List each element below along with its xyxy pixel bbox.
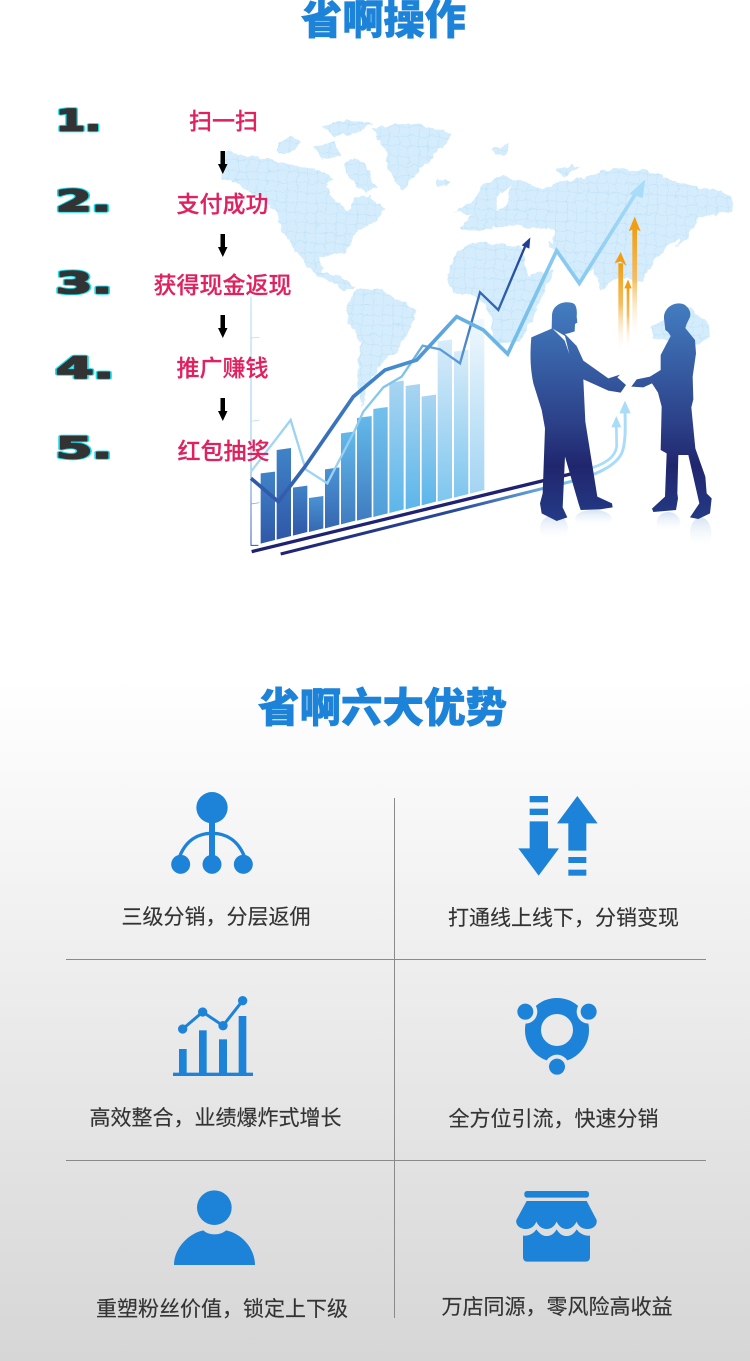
step 1 number: 1. (56, 104, 101, 138)
floor reflections (540, 510, 711, 549)
arrow 4 (218, 398, 228, 421)
icon: bar and line chart (173, 996, 253, 1076)
step 5 number (56, 431, 112, 465)
bar chart (261, 319, 484, 544)
heading: 省啊六大优势: 省啊六大优势 (258, 685, 507, 731)
step 3 number: 3. (56, 266, 112, 300)
step 4 number: 4. (56, 351, 114, 385)
businessman silhouette (530, 302, 626, 521)
step 5 number: 5. (56, 431, 112, 465)
chart axis (251, 297, 259, 545)
steps list (56, 104, 292, 465)
icon: up and down arrows (518, 796, 598, 876)
step 4 number (56, 351, 114, 385)
step 3 label: 获得现金返现 (154, 272, 292, 298)
text: 高效整合: 高效整合，业绩爆炸式增长 (90, 1107, 342, 1130)
step 1 number (56, 104, 101, 138)
sea cut-outs (320, 181, 555, 277)
illustration: world map, growth chart and business people (221, 120, 732, 554)
arrow 3 (218, 315, 228, 338)
arrow 1 (218, 151, 228, 174)
base lines (252, 410, 625, 554)
step 3 number: 3. (56, 266, 112, 300)
step 5 label: 红包抽奖 (178, 438, 270, 464)
text: 三级分销: 三级分销，分层返佣 (122, 906, 310, 929)
businesswoman silhouette (631, 303, 712, 519)
step 3 number (56, 266, 112, 300)
line series A (251, 237, 530, 483)
step 5 number: 5. (56, 431, 112, 465)
step 2 number: 2. (56, 184, 111, 218)
icon: three-level hierarchy (171, 792, 253, 874)
text: 万店同源: 万店同源，零风险高收益 (442, 1296, 672, 1319)
step 4 label: 推广赚钱 (176, 355, 268, 381)
step 2 label: 支付成功 (176, 191, 268, 217)
world map (221, 120, 732, 407)
text: 全方位引流: 全方位引流，快速分销 (448, 1108, 658, 1131)
step 1 number: 1. (56, 104, 101, 138)
text: 重塑粉丝价值: 重塑粉丝价值，锁定上下级 (96, 1298, 348, 1321)
step 4 number: 4. (56, 351, 114, 385)
arrow 2 (218, 234, 228, 257)
icon: person (174, 1190, 255, 1265)
icon: storefront (516, 1191, 597, 1262)
orange arrows (615, 217, 641, 353)
text: 打通线上线下: 打通线上线下，分销变现 (448, 907, 679, 930)
step 2 number: 2. (56, 184, 111, 218)
icon: ring with three nodes (513, 1000, 601, 1079)
step 2 number (56, 184, 111, 218)
step 1 label: 扫一扫 (189, 108, 258, 134)
small light arrowheads (611, 401, 631, 427)
line series B (251, 179, 645, 502)
